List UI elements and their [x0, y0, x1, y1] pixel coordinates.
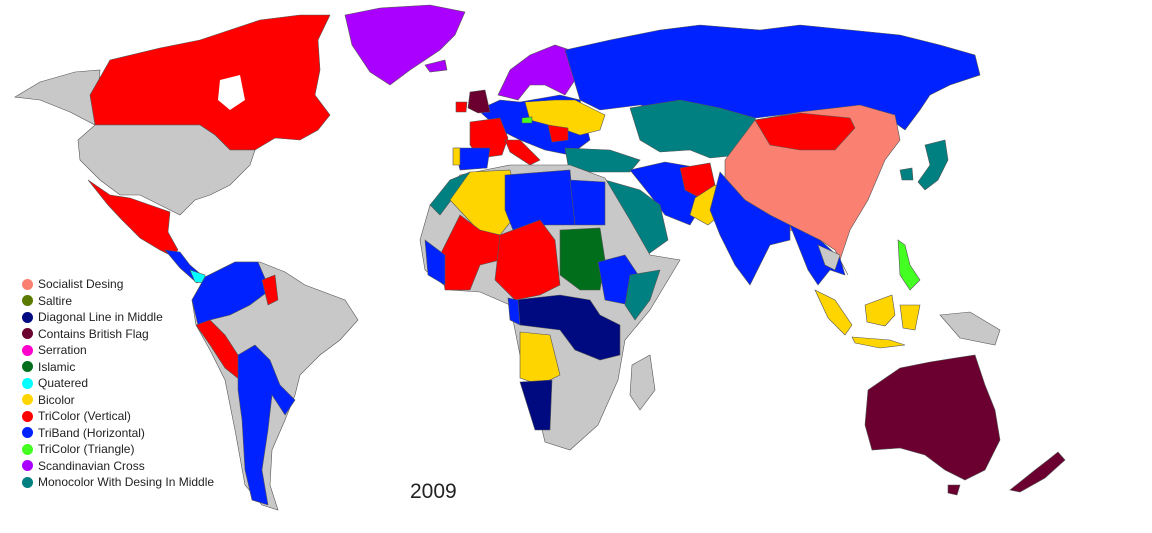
South America: [192, 262, 358, 510]
legend: Diagonal Line in Middle: [38, 310, 163, 324]
Southeast Asia islands: [815, 290, 1000, 348]
legend: TriColor (Triangle): [38, 442, 134, 456]
legend: TriBand (Horizontal): [38, 426, 145, 440]
legend: Scandinavian Cross: [38, 458, 145, 472]
Greenland: [345, 5, 465, 85]
Africa: [420, 165, 680, 450]
year label: 2009: [410, 480, 457, 503]
legend: [22, 277, 214, 489]
legend: Contains British Flag: [38, 326, 149, 340]
legend: Serration: [38, 343, 87, 357]
legend: Bicolor: [38, 392, 75, 406]
legend: TriColor (Vertical): [38, 409, 131, 423]
legend: Islamic: [38, 360, 75, 374]
Russia and Asia: [565, 25, 980, 290]
legend: Quatered: [38, 376, 88, 390]
New Zealand: [1010, 452, 1065, 492]
North America: [15, 15, 330, 283]
Australia: [865, 355, 1000, 480]
legend: Socialist Desing: [38, 277, 123, 291]
legend: Saltire: [38, 294, 72, 308]
legend: Monocolor With Desing In Middle: [38, 475, 214, 489]
Europe: [453, 45, 640, 172]
